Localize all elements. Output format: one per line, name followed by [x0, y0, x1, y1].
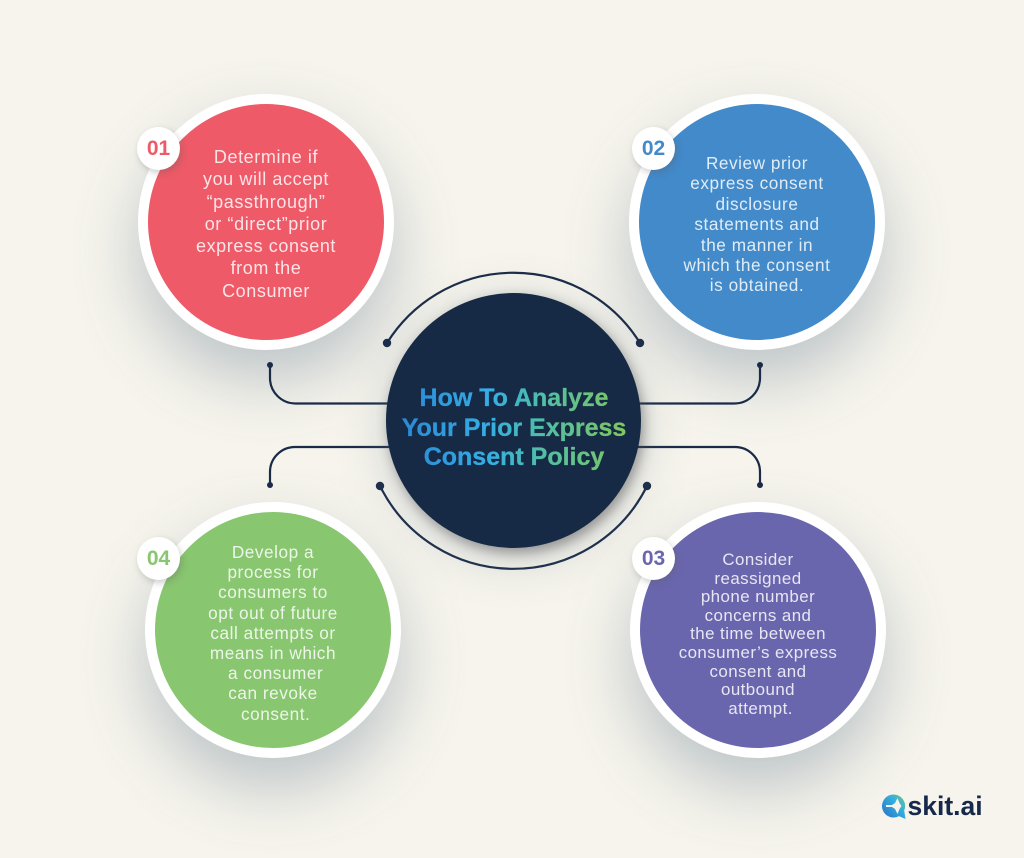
text: step 03 description: the time between — [690, 624, 826, 643]
title: Consent Policy — [424, 443, 604, 471]
text: step 02 description: express consent — [690, 173, 824, 193]
text: step 04 description: consumers to — [218, 582, 328, 602]
text: step 04 description: call attempts or — [210, 623, 336, 643]
text: step 01 description: “passthrough” — [207, 192, 325, 212]
text: step 03 description: reassigned — [714, 569, 802, 588]
title: Your Prior Express — [402, 414, 626, 442]
text: step 03 description: outbound — [721, 680, 795, 699]
text: step 02 description: disclosure — [716, 194, 798, 214]
text: step 04 description: Develop a — [232, 542, 314, 562]
text: step 02 description: Review prior — [706, 153, 808, 173]
text: step 02 description — [684, 153, 830, 295]
badge: 02 — [632, 127, 675, 170]
text: step 04 description: opt out of future — [208, 603, 338, 623]
title: How To Analyze — [420, 384, 609, 412]
logo: skit.ai — [882, 791, 983, 821]
text: step 03 description — [679, 550, 837, 718]
text: step 04 description: a consumer — [228, 663, 323, 683]
badge: 01 — [137, 127, 180, 170]
wordmark: skit.ai — [908, 791, 983, 821]
text: step 04 description: consent. — [241, 704, 310, 724]
text: step 01 description — [196, 147, 336, 301]
text: step 02 description: statements and — [694, 214, 820, 234]
title — [402, 384, 626, 471]
text: step 04 description — [208, 542, 338, 724]
text: step 03 description: concerns and — [705, 606, 811, 625]
badge: 02: 02 — [642, 137, 665, 160]
text: step 02 description: is obtained. — [710, 275, 804, 295]
center circle — [386, 293, 641, 548]
text: step 01 description: Determine if — [214, 147, 318, 167]
badge: 01: 01 — [147, 137, 170, 160]
text: step 01 description: or “direct”prior — [205, 214, 327, 234]
text: step 03 description: attempt. — [728, 699, 793, 718]
text: step 03 description: Consider — [722, 550, 794, 569]
badge: 03 — [632, 537, 675, 580]
text: step 04 description: process for — [227, 562, 319, 582]
panel: step 02 — [599, 94, 915, 410]
text: step 02 description: the manner in — [701, 235, 813, 255]
badge: 04: 04 — [147, 547, 170, 570]
panel: step 03 — [600, 502, 916, 818]
text: step 01 description: from the — [231, 258, 301, 278]
text: step 02 description: which the consent — [684, 255, 830, 275]
text: step 01 description: Consumer — [222, 281, 310, 301]
text: step 04 description: can revoke — [228, 683, 318, 703]
text: step 03 description: consent and — [710, 662, 806, 681]
text: step 03 description: consumer’s express — [679, 643, 837, 662]
text: step 03 description: phone number — [701, 587, 815, 606]
text: step 01 description: express consent — [196, 236, 336, 256]
panel: step 01 — [108, 94, 424, 410]
badge: 04 — [137, 537, 180, 580]
text: step 01 description: you will accept — [203, 169, 329, 189]
icon: speech bubble with waveform — [882, 794, 906, 819]
badge: 03: 03 — [642, 547, 665, 570]
panel: step 04 — [115, 502, 431, 818]
text: step 04 description: means in which — [210, 643, 336, 663]
